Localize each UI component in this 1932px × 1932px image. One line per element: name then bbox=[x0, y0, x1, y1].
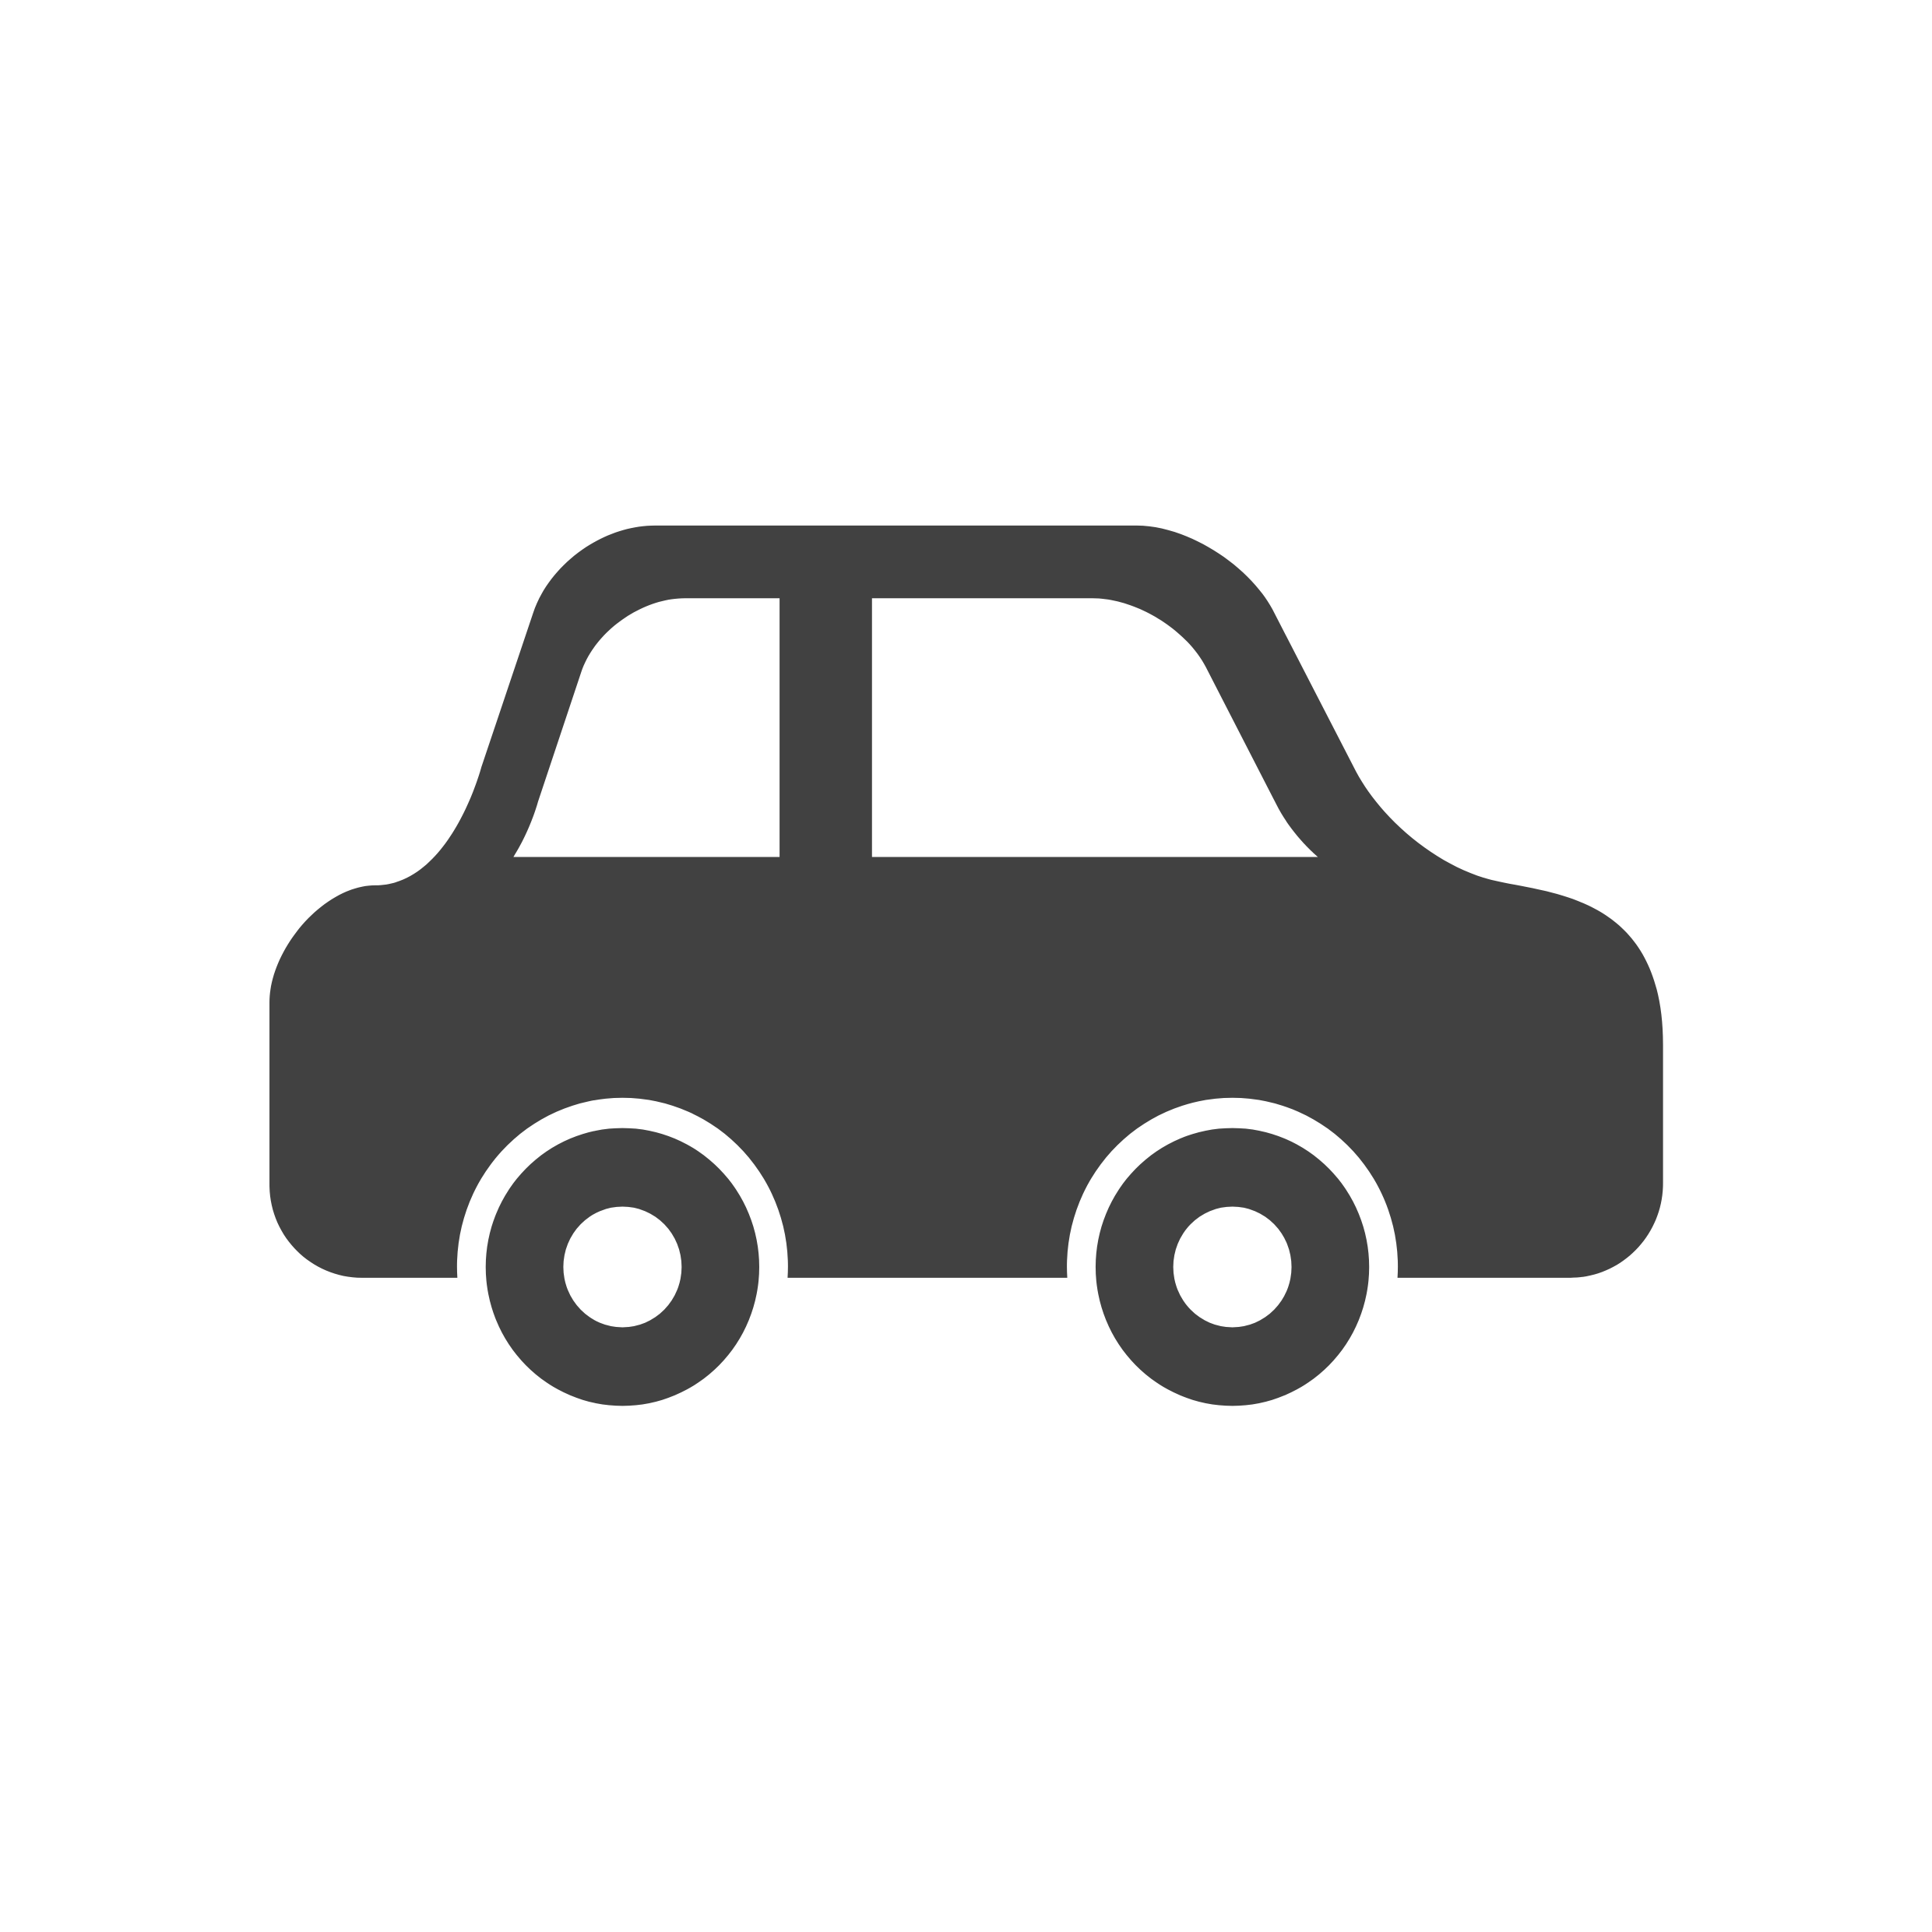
rear wheel bbox=[486, 1128, 759, 1406]
car illustration bbox=[269, 526, 1663, 1406]
front wheel bbox=[1096, 1128, 1369, 1406]
car body with windows bbox=[269, 526, 1663, 1278]
